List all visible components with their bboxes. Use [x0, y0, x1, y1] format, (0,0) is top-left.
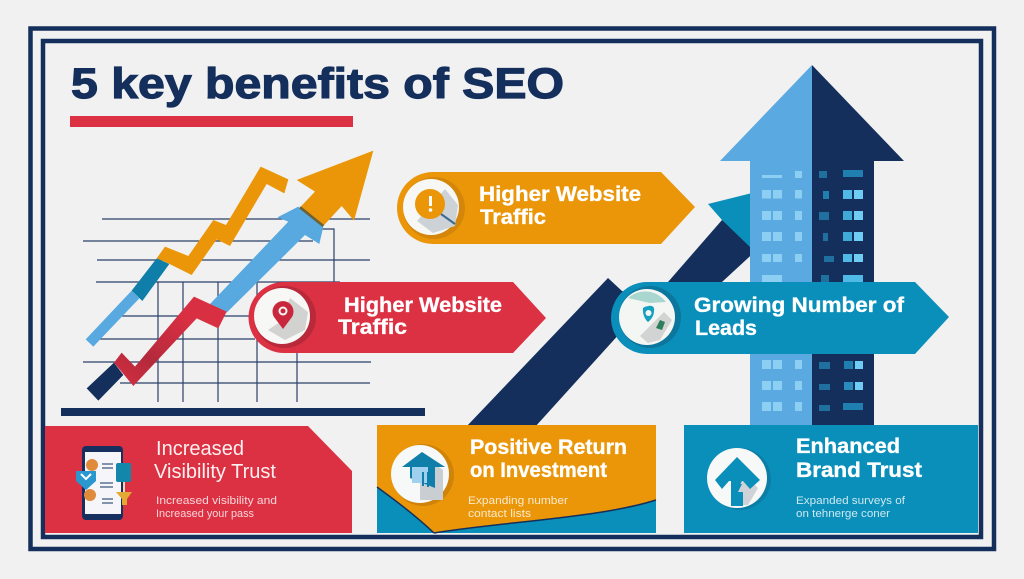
upper diagonal band: [668, 220, 760, 282]
panel: enhanced brand trust: [684, 425, 978, 533]
callout: growing number of leads: [611, 282, 949, 354]
panel: positive return on investment: on Investment: [470, 459, 607, 482]
lower light blue tail: [86, 291, 139, 347]
panel: positive return on investment: [377, 425, 656, 533]
inner frame: [43, 41, 981, 537]
panel: increased visibility trust: Visibility Trust: [154, 461, 276, 483]
orange arrow head: [297, 151, 373, 226]
callout text: Growing Number of: [694, 294, 905, 317]
line chart grid: [83, 219, 371, 402]
callout: red higher website traffic: [248, 282, 546, 353]
teal arrow tip: [708, 191, 760, 255]
panel body text: Increased visibility and: [156, 495, 277, 507]
panel: enhanced brand trust: Brand Trust: [796, 459, 922, 482]
navy diagonal arrow: [466, 191, 760, 427]
callout: growing number of leads: Leads: [695, 317, 757, 340]
chart baseline: [61, 408, 425, 416]
panel body text: Expanding number: [468, 495, 568, 507]
navy tail: [87, 363, 123, 401]
panel heading: Increased: [156, 438, 244, 460]
panel: enhanced brand trust: on tehnerge coner: [796, 508, 890, 520]
icon: map pin: [254, 286, 316, 348]
panel body text: Expanded surveys of: [796, 495, 906, 507]
icon: up arrow: [707, 448, 771, 510]
icon: house arrow: [391, 444, 454, 506]
arrow joint: [300, 207, 323, 226]
icon: heart badge: [619, 286, 681, 348]
orange curved layer: [377, 425, 656, 533]
arrow right half: [812, 65, 904, 426]
panel: increased visibility trust: [45, 426, 352, 533]
callout text: Higher Website: [344, 294, 502, 317]
large building arrow: [720, 65, 904, 426]
icon: magnifier with alert: [403, 177, 465, 239]
callout: red higher website traffic: Traffic: [338, 316, 407, 339]
callout: orange higher website traffic: [397, 172, 695, 244]
orange zigzag line: [157, 167, 288, 275]
callout text: Higher Website: [479, 183, 641, 206]
arrow left half: [720, 65, 812, 426]
title: 5 key benefits of SEO: [71, 60, 564, 108]
light blue arrow: [210, 207, 323, 313]
lower diagonal band: [466, 278, 650, 427]
title underline: [70, 116, 353, 127]
rising arrows: [86, 151, 373, 401]
windows right: [819, 170, 863, 411]
panel heading: Positive Return: [470, 436, 627, 459]
panel: increased visibility trust: Increased your pass: [156, 508, 254, 520]
panel: positive return on investment: contact lists: [468, 508, 532, 520]
panel heading: Enhanced: [796, 435, 900, 458]
teal segment: [132, 258, 169, 301]
red zigzag line: [114, 297, 227, 386]
callout: orange higher website traffic: Traffic: [480, 206, 546, 229]
windows left: [762, 171, 802, 411]
icon: phone with badges: [76, 446, 132, 520]
